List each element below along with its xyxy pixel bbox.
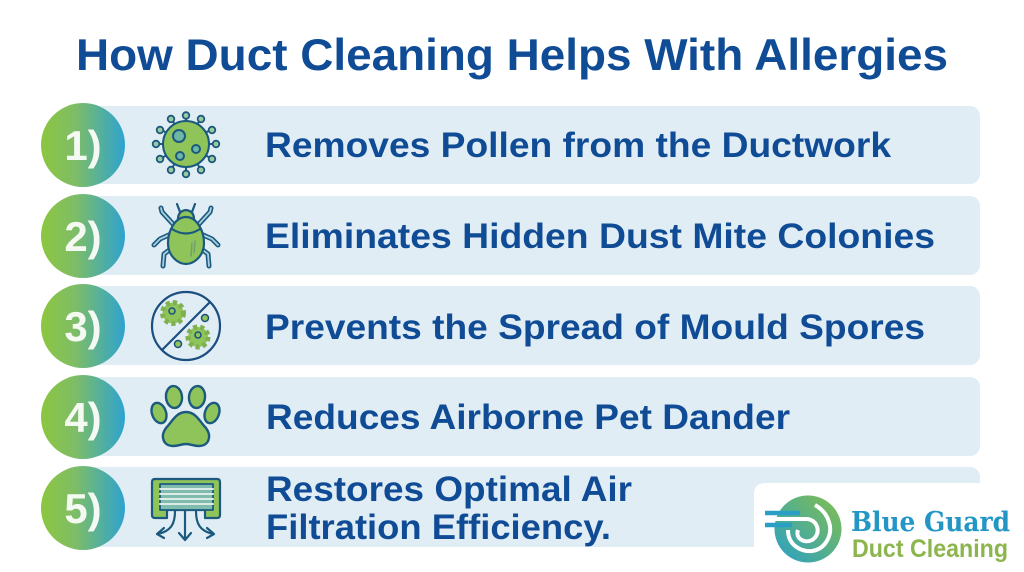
row 1 number badge — [41, 103, 125, 187]
row 5 — [41, 466, 980, 550]
logo mark — [765, 496, 842, 562]
row 3 — [41, 284, 980, 368]
title: How Duct Cleaning Helps With Allergies — [76, 31, 948, 80]
row 4 bar — [85, 377, 980, 456]
row 2 — [41, 194, 980, 278]
row 2 number badge — [41, 194, 125, 278]
row 3 number badge: 3) — [64, 303, 102, 350]
row 5 text: Filtration Efficiency. — [266, 508, 611, 547]
row 1 bar — [85, 106, 980, 184]
row 5 text — [266, 470, 632, 547]
row 5 bar — [85, 467, 980, 547]
row 1 text: Removes Pollen from the Ductwork — [265, 126, 892, 165]
row 2 text: Eliminates Hidden Dust Mite Colonies — [265, 217, 935, 256]
row 3 text: Prevents the Spread of Mould Spores — [265, 308, 925, 347]
row 4 text: Reduces Airborne Pet Dander — [266, 398, 790, 437]
row 4 number badge — [41, 375, 125, 459]
icon: paw print — [149, 385, 222, 446]
logo panel — [754, 483, 1024, 572]
logo tagline: Duct Cleaning — [852, 535, 1008, 563]
row 5 text: Restores Optimal Air — [266, 470, 632, 509]
row 2 number badge: 2) — [64, 213, 102, 260]
row 1 number badge: 1) — [64, 122, 102, 169]
row 5 number badge: 5) — [64, 485, 102, 532]
logo name: Blue Guard — [851, 507, 1010, 538]
icon: pollen — [153, 112, 219, 177]
row 4 — [41, 375, 980, 459]
row 2 bar — [85, 196, 980, 275]
icon: no mould spores — [152, 292, 220, 360]
row 1 — [41, 103, 980, 187]
icon: dust mite — [154, 204, 218, 266]
icon: air filter vent — [152, 479, 220, 540]
row 5 number badge — [41, 466, 125, 550]
row 3 bar — [85, 286, 980, 365]
row 4 number badge: 4) — [64, 394, 102, 441]
row 3 number badge — [41, 284, 125, 368]
